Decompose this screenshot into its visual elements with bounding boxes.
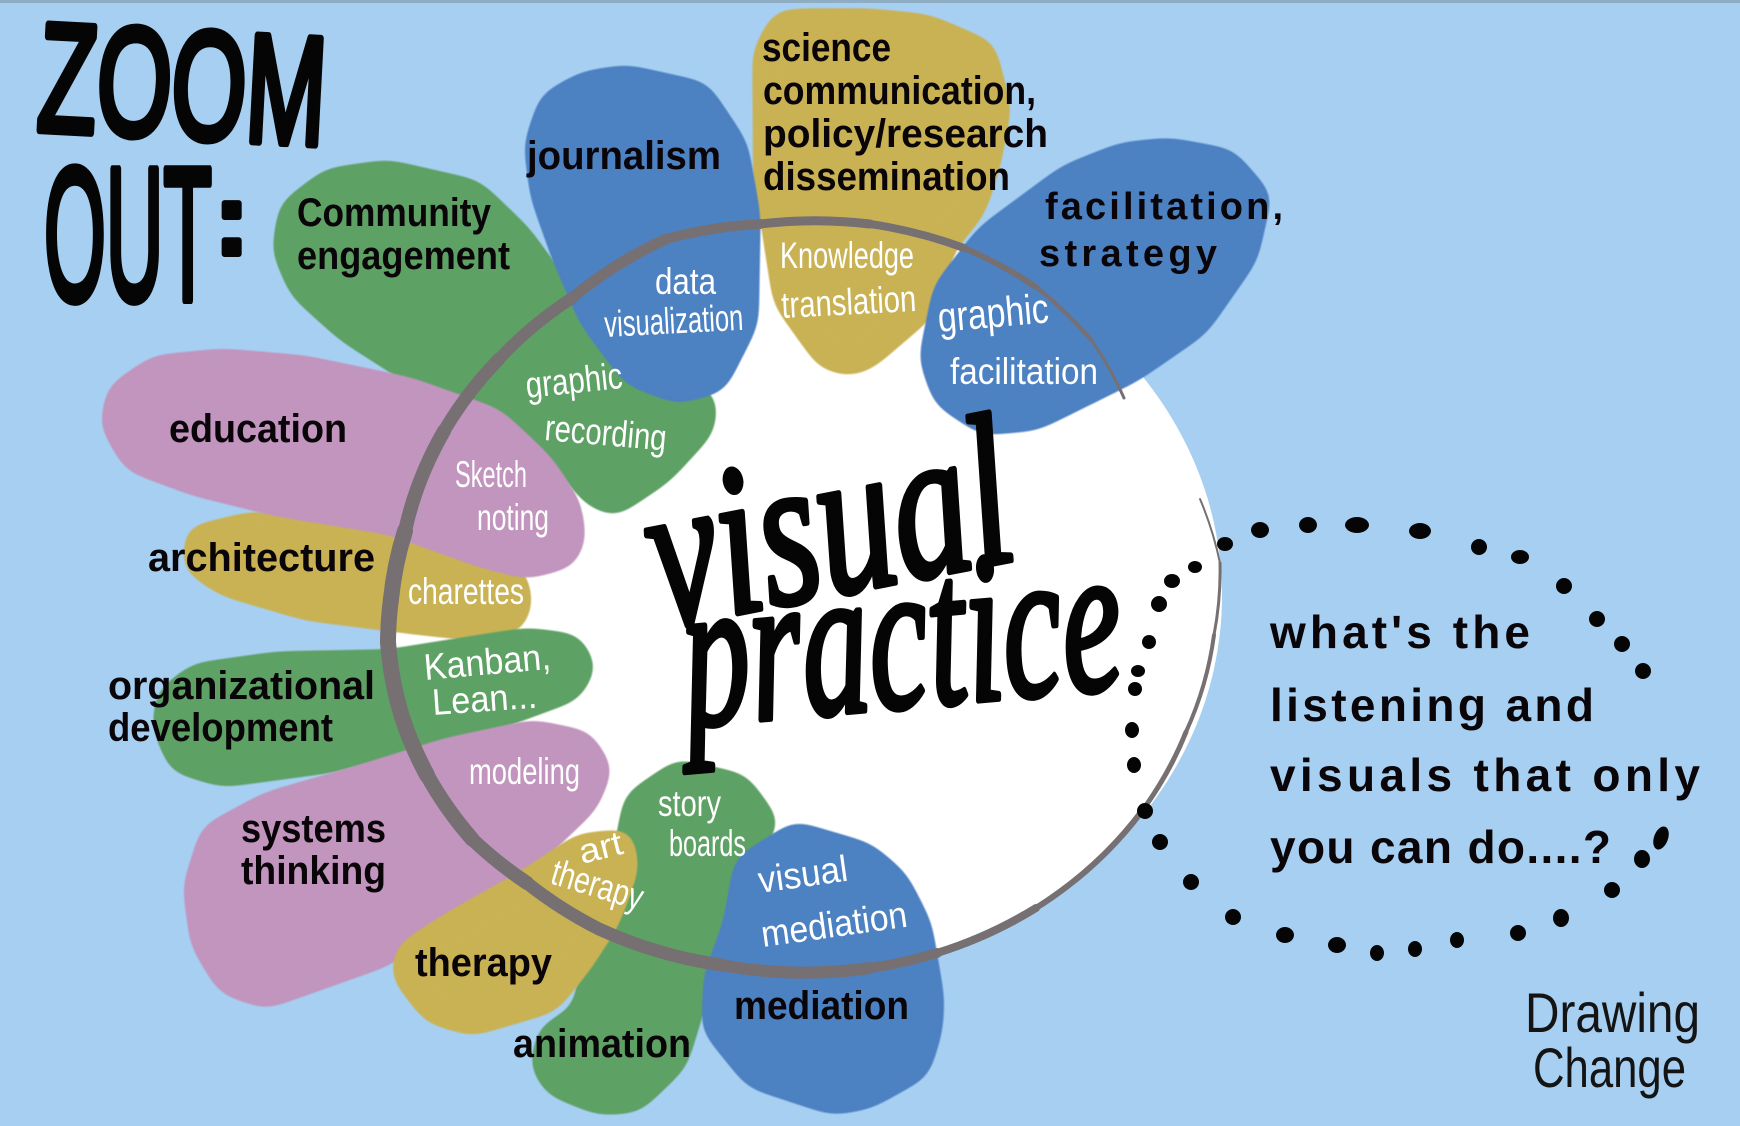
white central circle: [388, 222, 1222, 970]
inner practice labels: [408, 235, 1098, 955]
title: zoom out: [34, 0, 331, 341]
credit: drawing change: Change: [1533, 1036, 1686, 1099]
outer practice labels: [108, 26, 1283, 1066]
label: science communication: [762, 26, 1048, 199]
petal: science communication (gold): [752, 8, 1012, 377]
dotted thought bubble: [1125, 517, 1672, 961]
label: art therapy: therapy: [547, 851, 649, 918]
title: zoom out: OUT: [44, 129, 212, 341]
label: data visualization: [603, 261, 744, 345]
label: graphic facilitation: [936, 284, 1098, 392]
label: sketch noting: Sketch: [455, 454, 527, 495]
label: story boards: story: [658, 783, 721, 824]
label: systems thinking: [241, 807, 386, 893]
petal: organizational development (green): [151, 627, 598, 788]
label: community engagement: engagement: [297, 234, 510, 278]
label: graphic recording: recording: [543, 407, 668, 459]
label: journalism: journalism: [526, 134, 721, 178]
label: education: education: [169, 407, 347, 451]
label: science communication: science: [762, 26, 891, 70]
label: systems thinking: thinking: [241, 849, 386, 893]
label: mediation: mediation: [734, 984, 909, 1028]
label: graphic recording: [524, 355, 668, 459]
label: science communication: dissemination: [763, 155, 1010, 199]
heading line: practice: practice: [663, 496, 1130, 774]
label: art therapy: art: [575, 824, 627, 872]
label: sketch noting: noting: [477, 497, 549, 538]
grey hand-drawn circle outline: [388, 221, 1220, 973]
petal: systems thinking (pink): [182, 719, 614, 1010]
label: organizational development: [108, 664, 375, 750]
top edge line: [0, 0, 1740, 3]
label: architecture: architecture: [148, 536, 375, 580]
heading line: visual: visual: [625, 370, 1030, 674]
label: art therapy: [547, 824, 649, 918]
question text: what's the: [1269, 606, 1530, 658]
label: kanban, lean: Lean...: [431, 675, 538, 723]
label: data visualization: visualization: [603, 297, 744, 345]
label: knowledge translation: [780, 235, 917, 326]
label: community engagement: Community: [297, 191, 492, 235]
label: science communication: communication,: [763, 69, 1036, 113]
label: modeling: modeling: [469, 751, 580, 792]
question text: [1269, 606, 1700, 873]
petal: mediation (blue): [701, 820, 945, 1116]
label: science communication: policy/research: [763, 112, 1048, 156]
title colon: :: [215, 164, 248, 276]
label: kanban, lean: [422, 636, 552, 723]
label: story boards: [658, 783, 746, 864]
label: story boards: boards: [669, 823, 746, 864]
label: charettes: charettes: [408, 571, 524, 612]
label: organizational development: development: [108, 706, 333, 750]
question text: visuals that only: [1270, 749, 1700, 801]
label: sketch noting: [455, 454, 549, 538]
label: visual mediation: [755, 848, 910, 955]
label: graphic recording: graphic: [524, 355, 624, 406]
label: facilitation, strategy: [1039, 186, 1283, 275]
label: community engagement: [297, 191, 510, 278]
question text: listening and: [1270, 679, 1594, 731]
label: facilitation, strategy: strategy: [1039, 233, 1217, 275]
label: knowledge translation: Knowledge: [780, 235, 914, 276]
credit: drawing change: Drawing: [1525, 981, 1700, 1044]
central heading: visual practice: [625, 370, 1130, 774]
label: graphic facilitation: graphic: [936, 284, 1050, 341]
petal: facilitation (blue): [918, 137, 1273, 436]
label: therapy: therapy: [415, 941, 553, 985]
label: visual mediation: mediation: [758, 894, 910, 955]
petals: [99, 8, 1273, 1116]
label: systems thinking: systems: [241, 807, 386, 851]
petal: education (pink): [99, 348, 587, 580]
label: kanban, lean: Kanban,: [422, 636, 552, 688]
petal: animation and storyboards (green): [529, 758, 781, 1116]
label: graphic facilitation: facilitation: [950, 351, 1098, 392]
label: facilitation, strategy: facilitation,: [1045, 186, 1283, 228]
petal: architecture (gold): [182, 511, 534, 641]
petal: therapy (gold): [390, 828, 640, 1037]
label: visual mediation: visual: [755, 848, 850, 901]
credit: drawing change: [1525, 981, 1700, 1099]
question text: you can do....?: [1270, 821, 1611, 873]
label: data visualization: data: [655, 261, 716, 302]
petal: journalism (blue): [523, 64, 761, 405]
label: animation: animation: [513, 1022, 691, 1066]
petal: community engagement (green): [271, 159, 718, 518]
label: knowledge translation: translation: [780, 278, 917, 326]
label: organizational development: organizational: [108, 664, 375, 708]
